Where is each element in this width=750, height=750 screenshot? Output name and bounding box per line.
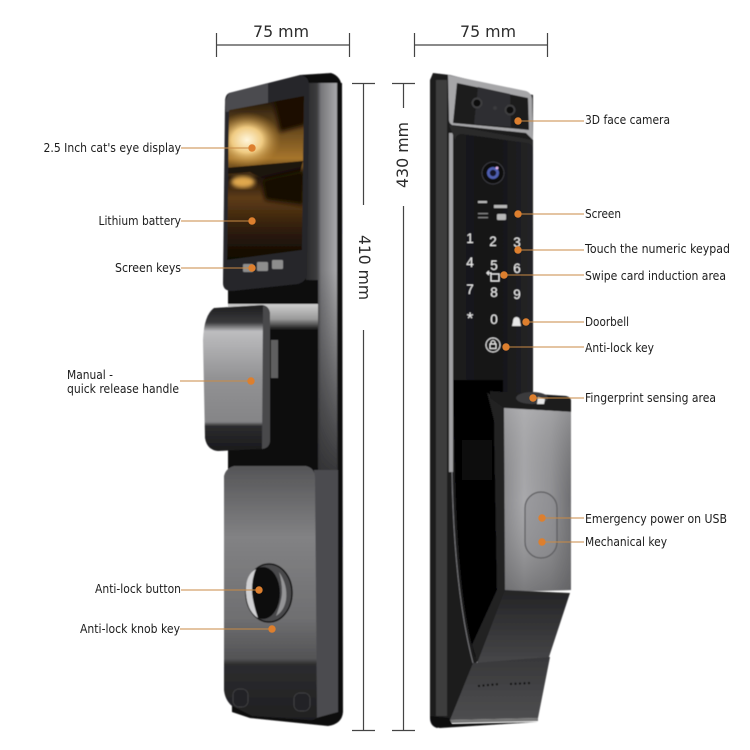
callout: emergency power: Emergency power on USB <box>585 512 727 526</box>
handle top with fingerprint sensor <box>490 391 571 412</box>
camera sensor <box>493 106 497 110</box>
numeric keypad: 9 <box>513 287 521 302</box>
callout: numeric keypad: Touch the numeric keypad <box>584 242 730 256</box>
right width dimension: 75 mm <box>460 22 516 41</box>
callout: quick release handle <box>67 368 255 396</box>
lower plate <box>224 462 338 720</box>
left width dimension <box>216 22 350 57</box>
screen image <box>227 96 304 260</box>
430 mm height dimension <box>392 84 415 730</box>
body rail <box>430 73 533 728</box>
card icon <box>487 271 499 281</box>
callout: anti-lock knob key <box>80 622 276 636</box>
callout: screen <box>514 207 621 221</box>
numeric keypad: 4 <box>466 255 474 270</box>
screw cover right <box>294 693 310 711</box>
numeric keypad: 5 <box>490 258 498 273</box>
screen keys <box>243 260 283 272</box>
callout: anti-lock knob key: Anti-lock knob key <box>80 622 180 636</box>
screen panel <box>213 75 318 304</box>
main camera <box>482 162 504 184</box>
callout: anti-lock button: Anti-lock button <box>95 582 181 596</box>
handle recess <box>453 380 503 657</box>
callout: mechanical key <box>538 535 667 549</box>
410 mm height dimension <box>352 84 375 730</box>
handle side <box>472 392 505 664</box>
lower trim curve <box>452 472 473 663</box>
keypad panel <box>449 125 533 395</box>
numeric keypad: 0 <box>490 312 498 327</box>
410 mm height dimension: 410 mm <box>355 235 374 300</box>
callout: anti-lock key: Anti-lock key <box>585 341 654 355</box>
left side highlight <box>436 80 447 716</box>
anti-lock knob <box>246 564 292 622</box>
callout: swipe card area: Swipe card induction area <box>585 269 726 283</box>
numeric keypad: 3 <box>513 235 521 250</box>
bottom trim <box>430 716 538 728</box>
handle silver face <box>504 408 571 592</box>
status display <box>478 201 507 220</box>
right lock: outside panel view <box>430 73 571 728</box>
callout: screen keys: Screen keys <box>115 261 181 275</box>
camera module <box>448 75 533 140</box>
recessed slots behind handle <box>271 340 278 378</box>
callout: doorbell: Doorbell <box>585 315 629 329</box>
handle base with vents <box>448 657 550 723</box>
430 mm height dimension: 430 mm <box>393 122 412 188</box>
callout: 3D face camera <box>514 113 670 127</box>
callout: mechanical key: Mechanical key <box>585 535 667 549</box>
handle lower section <box>476 590 570 666</box>
left width dimension: 75 mm <box>253 22 309 41</box>
screw cover left <box>233 689 248 707</box>
callout: lithium battery <box>98 214 256 228</box>
numeric keypad <box>466 231 521 328</box>
callout: doorbell <box>522 315 629 329</box>
numeric keypad: * <box>467 309 474 328</box>
numeric keypad: 8 <box>490 285 498 300</box>
callout: fingerprint area <box>529 391 716 405</box>
left lock: inside panel view <box>203 73 343 726</box>
silver edge strip <box>306 83 342 483</box>
quick release handle <box>203 305 270 451</box>
callout: numeric keypad <box>514 242 730 256</box>
callout: anti-lock key <box>502 341 654 355</box>
callout: 3D face camera: 3D face camera <box>585 113 670 127</box>
middle plate <box>228 300 318 490</box>
numeric keypad: 1 <box>466 231 474 246</box>
callout: screen keys <box>115 261 256 275</box>
numeric keypad: 7 <box>466 282 474 297</box>
outer body <box>228 73 343 726</box>
strip darkening toward the bottom <box>318 270 338 470</box>
numeric keypad: 6 <box>513 261 521 276</box>
USB cover oval <box>525 492 557 558</box>
callout: quick release handle: Manual - <box>67 368 113 382</box>
callout: quick release handle: quick release handle <box>67 382 179 396</box>
callout: 2.5 inch display: 2.5 Inch cat's eye display <box>44 141 181 155</box>
callout: anti-lock button <box>95 582 263 596</box>
camera lens right <box>506 106 514 114</box>
anti-lock icon <box>486 338 500 352</box>
callout: screen: Screen <box>585 207 621 221</box>
callout: swipe card area <box>500 269 726 283</box>
silver strip <box>449 133 453 472</box>
right width dimension <box>414 22 548 57</box>
bell icon <box>512 317 521 326</box>
camera lens left <box>472 98 482 108</box>
callout: lithium battery: Lithium battery <box>98 214 181 228</box>
callout: fingerprint area: Fingerprint sensing area <box>585 391 716 405</box>
numeric keypad: 2 <box>489 234 497 249</box>
